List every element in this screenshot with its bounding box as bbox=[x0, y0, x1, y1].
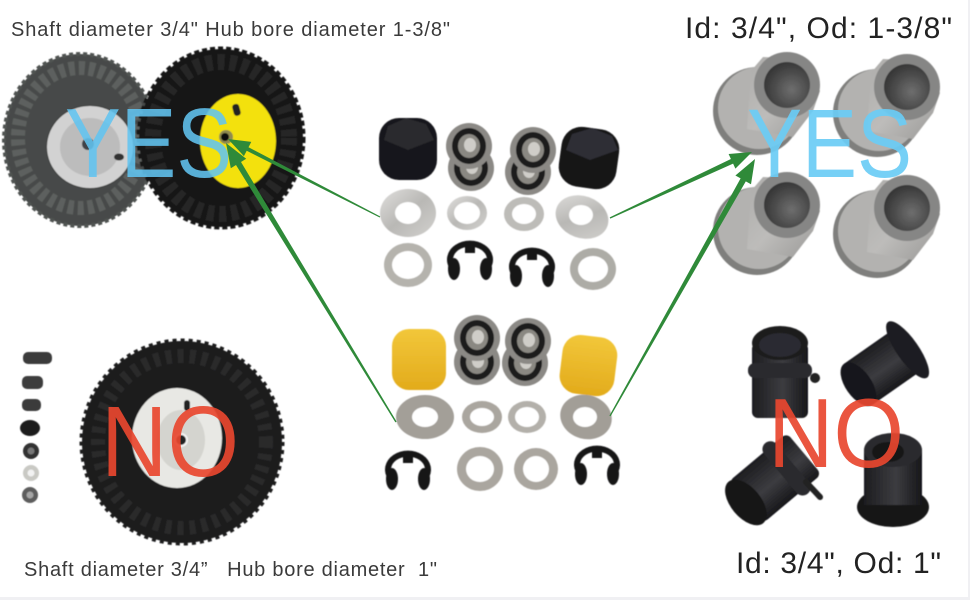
arrow: top kit to yellow wheel hub bbox=[228, 139, 380, 218]
yellow cap left bbox=[392, 329, 446, 390]
black tire with white rim bbox=[82, 341, 282, 543]
heading: incompatible bushing size: Id: 3/4", Od: 1" bbox=[736, 547, 941, 580]
no label over bushings: NO bbox=[768, 378, 904, 488]
arrow: top kit to steel bushings bbox=[610, 152, 752, 219]
bushing top left bbox=[748, 326, 820, 418]
bottom edge strip bbox=[0, 597, 970, 600]
panel: yellow cap kit bbox=[386, 315, 619, 491]
right edge strip bbox=[968, 0, 970, 600]
panel: compatible wheels bbox=[4, 49, 303, 227]
black cap left bbox=[379, 118, 437, 180]
panel: steel hex bushings bbox=[713, 52, 940, 278]
bushing pin bbox=[806, 482, 820, 497]
arrow: bottom kit to yellow wheel hub bbox=[226, 143, 397, 422]
bushing bottom left bbox=[713, 428, 825, 537]
illustrations bbox=[4, 49, 940, 543]
yellow cap right bbox=[558, 333, 619, 398]
panel: black plastic bushings bbox=[713, 316, 936, 537]
arrow: bottom kit to steel bushings bbox=[609, 159, 755, 416]
heading: incompatible wheel size: Shaft diameter 3/4” Hub bore diameter 1" bbox=[24, 559, 437, 581]
yes label over wheels: YES bbox=[65, 88, 232, 198]
heading: compatible wheel size: Shaft diameter 3/4" Hub bore diameter 1-3/8" bbox=[11, 19, 450, 41]
washers row 3 bbox=[396, 389, 617, 445]
yes label over bushings: YES bbox=[747, 89, 912, 198]
washers and clips row 4 bbox=[386, 447, 619, 491]
bushing bottom right bbox=[857, 433, 929, 527]
bearings bottom bbox=[454, 315, 551, 386]
black turf tire with yellow rim bbox=[139, 49, 303, 227]
bushing top right bbox=[828, 316, 936, 420]
heading: compatible bushing size: Id: 3/4", Od: 1-3/8" bbox=[685, 12, 952, 45]
panel: non-compatible wheel bbox=[20, 341, 282, 543]
black cap right bbox=[556, 124, 622, 192]
washers row 1 bbox=[380, 188, 615, 246]
no label over wheel: NO bbox=[101, 386, 239, 498]
panel: black cap kit bbox=[379, 118, 622, 290]
gray turf tire bbox=[4, 54, 156, 226]
small parts stack bbox=[20, 352, 52, 503]
bearings top bbox=[446, 123, 556, 195]
washers and clips row 2 bbox=[384, 243, 616, 290]
